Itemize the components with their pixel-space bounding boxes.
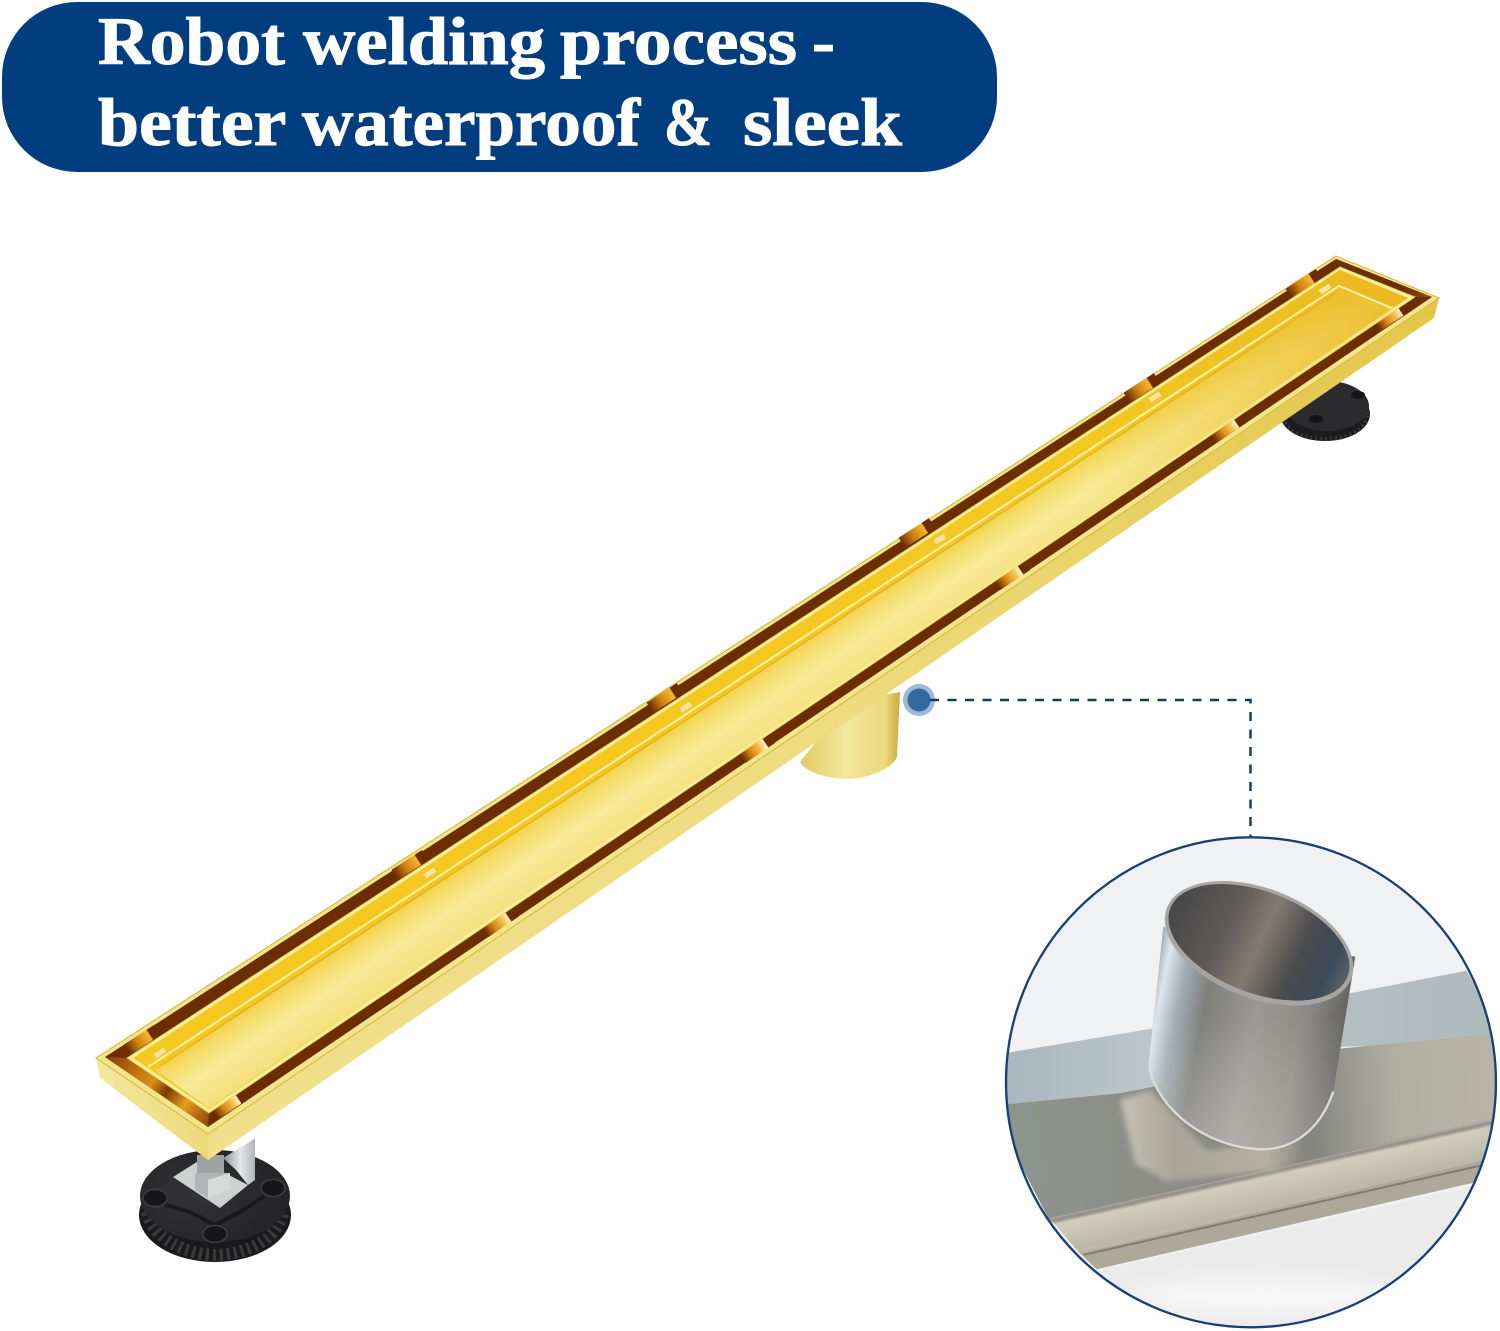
right end slot shade xyxy=(1336,259,1432,297)
left end face xyxy=(96,1058,208,1160)
right adjustable foot xyxy=(1280,381,1370,441)
title line 1: Robot xyxy=(98,3,285,79)
gold linear drain xyxy=(96,256,1439,1160)
dark slot xyxy=(105,259,1432,1127)
tray floor xyxy=(155,289,1395,1108)
detail inset: welded pipe photo xyxy=(1000,830,1500,1330)
title line 2: better xyxy=(98,84,285,160)
inset circle outline xyxy=(1006,837,1496,1327)
tray tabs xyxy=(154,284,1331,1058)
left adjustable foot xyxy=(139,1138,291,1262)
weld flare xyxy=(1120,1090,1303,1182)
title line 2: waterproof xyxy=(302,84,641,160)
title line 2: sleek xyxy=(743,84,902,160)
pipe body xyxy=(1148,927,1355,1150)
title banner xyxy=(2,2,997,172)
pipe opening xyxy=(1164,881,1354,1006)
right end gold shading xyxy=(1050,270,1408,500)
front lip xyxy=(1050,1118,1500,1254)
slot reflections xyxy=(124,269,1410,1119)
callout marker dot xyxy=(903,684,935,716)
tray ridge lines xyxy=(148,286,1394,1067)
lower rail xyxy=(1080,1157,1500,1269)
foot base xyxy=(139,1168,291,1262)
tile tray rim xyxy=(127,267,1415,1113)
left end slot glow xyxy=(105,1057,209,1127)
front side face xyxy=(208,298,1439,1160)
back wall band xyxy=(1000,971,1500,1107)
weld seam xyxy=(1149,1067,1333,1149)
bolt and nut xyxy=(197,1155,224,1175)
tray channel xyxy=(133,270,1408,1109)
floor below drain xyxy=(1087,1180,1500,1330)
drain pipe stub xyxy=(800,692,900,779)
bracket plate xyxy=(173,1160,248,1208)
title line 1: process xyxy=(560,3,797,79)
inner surface xyxy=(1000,1033,1500,1222)
title line 1: welding xyxy=(303,3,545,79)
top rim xyxy=(96,256,1439,1134)
title line 1: - xyxy=(812,3,835,79)
photo background xyxy=(1009,838,1473,1271)
title line 2: & xyxy=(664,84,712,160)
dashed leader line xyxy=(930,700,1250,838)
